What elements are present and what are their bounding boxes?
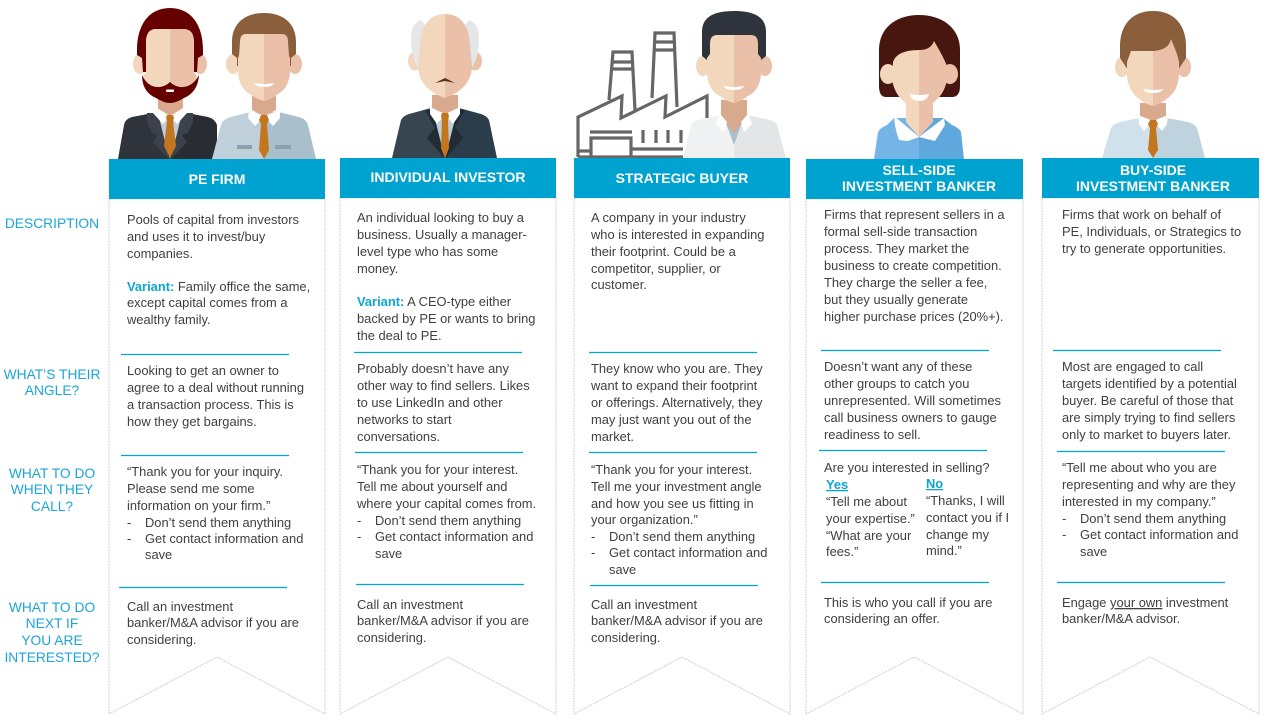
divider rules <box>819 350 989 582</box>
call response text: - <box>127 531 131 546</box>
description text: business to create competition. <box>824 258 1002 273</box>
row label: what to do next: WHAT TO DO <box>9 600 95 615</box>
description text: Pools of capital from investors <box>127 212 299 227</box>
call response text: where your capital comes from. <box>356 496 536 511</box>
angle text: Most are engaged to call <box>1062 359 1203 374</box>
call response text: - <box>357 529 361 544</box>
panel: sell-side investment banker <box>806 159 1023 714</box>
call response text: “Thank you for your inquiry. <box>127 464 283 479</box>
header: PE firm <box>109 159 325 199</box>
panel: strategic buyer <box>574 158 790 714</box>
description text: process. They market the <box>824 241 969 256</box>
illustration: strategic buyer person <box>683 11 786 158</box>
row label: what's their angle: ANGLE? <box>25 383 80 398</box>
header: individual investor: INDIVIDUAL INVESTOR <box>370 169 526 185</box>
header: buy-side investment banker: INVESTMENT BANKER <box>1076 178 1230 194</box>
header: sell-side investment banker: INVESTMENT BANKER <box>842 178 996 194</box>
angle text: to use LinkedIn and other <box>357 395 503 410</box>
description text: formal sell-side transaction <box>824 224 977 239</box>
divider rules <box>1053 350 1225 582</box>
no option: contact you if I <box>926 510 1009 525</box>
description text: Firms that work on behalf of <box>1062 207 1221 222</box>
next step text: Call an investment <box>357 597 463 612</box>
angle text: Doesn’t want any of these <box>824 359 972 374</box>
call response text: Don’t send them anything <box>145 515 291 530</box>
call response text: save <box>1080 544 1107 559</box>
yes option: “Tell me about <box>826 494 907 509</box>
angle text: or offerings. Alternatively, they <box>591 395 763 410</box>
angle text: only to market to buyers later. <box>1062 427 1231 442</box>
call response text: your organization.” <box>591 512 698 527</box>
illustration: sell-side banker woman <box>874 15 964 159</box>
angle text: agree to a deal without running <box>127 380 304 395</box>
header: strategic buyer <box>574 158 790 198</box>
next step text: Engage your own investment <box>1062 595 1228 610</box>
illustration: buy-side banker man <box>1102 11 1205 158</box>
no option: No <box>926 476 943 491</box>
next step text: considering. <box>357 630 427 645</box>
divider rules <box>354 352 524 584</box>
row label: description: DESCRIPTION <box>5 216 99 231</box>
call response text: Don’t send them anything <box>375 513 521 528</box>
no option: change my <box>926 527 990 542</box>
call response text: interested in my company.” <box>1062 494 1216 509</box>
description text: A CEO-type either <box>404 294 512 309</box>
angle text: networks to start <box>357 412 452 427</box>
description text: Firms that represent sellers in a <box>824 207 1005 222</box>
yes option: Yes <box>826 477 848 492</box>
row label: what to do next: NEXT IF <box>26 616 78 631</box>
person: bearded man <box>118 8 217 159</box>
description text: level type who has some <box>357 244 498 259</box>
person: smiling man with tie <box>212 13 316 159</box>
call response text: save <box>609 562 636 577</box>
call response text: Are you interested in selling? <box>824 460 990 475</box>
illustration: individual investor <box>392 14 497 158</box>
description text: higher purchase prices (20%+). <box>824 309 1004 324</box>
angle text: market. <box>591 429 634 444</box>
call response text: - <box>1062 527 1066 542</box>
row label: what's their angle: WHAT’S THEIR <box>4 367 100 382</box>
header: individual investor <box>340 158 556 198</box>
angle text: readiness to sell. <box>824 427 921 442</box>
description text: except capital comes from a <box>127 295 288 310</box>
header: buy-side investment banker: BUY-SIDE <box>1120 162 1186 178</box>
angle text: how they get bargains. <box>127 414 257 429</box>
next step text: banker/M&A advisor. <box>1062 611 1180 626</box>
header: buy-side investment banker <box>1042 158 1259 198</box>
angle text: are simply trying to find sellers <box>1062 410 1235 425</box>
panel: buy-side investment banker <box>1042 158 1259 714</box>
row label: what to do when they call: WHEN THEY <box>11 482 93 497</box>
angle text: conversations. <box>357 429 440 444</box>
next step text: considering. <box>591 630 661 645</box>
header: sell-side investment banker <box>806 159 1023 199</box>
panel: individual investor <box>340 158 556 714</box>
description text: their footprint. Could be a <box>591 244 737 259</box>
call response text: “Thank you for your interest. <box>357 462 518 477</box>
call response text: save <box>145 547 172 562</box>
no option: “Thanks, I will <box>926 493 1005 508</box>
angle text: targets identified by a potential <box>1062 376 1237 391</box>
yes option: “What are your <box>826 528 912 543</box>
call response text: Get contact information and <box>145 531 303 546</box>
call response text: representing and why are they <box>1062 477 1236 492</box>
description text: Family office the same, <box>174 279 310 294</box>
row label: what to do when they call: CALL? <box>31 499 73 514</box>
call response text <box>824 460 1009 559</box>
call response text: Tell me about yourself and <box>357 479 507 494</box>
call response text: information on your firm.” <box>127 498 270 513</box>
call response text: - <box>1062 511 1066 526</box>
angle text: may just want you out of the <box>591 412 752 427</box>
next step text: considering. <box>127 632 197 647</box>
call response text: Get contact information and <box>375 529 533 544</box>
description text: money. <box>357 261 398 276</box>
next step text: Call an investment <box>591 597 697 612</box>
call response text: and how you see us fitting in <box>591 496 754 511</box>
illustration: factory <box>578 33 707 157</box>
description text: and uses it to invest/buy <box>127 229 266 244</box>
description text: business. Usually a manager- <box>357 227 527 242</box>
call response text: - <box>127 515 131 530</box>
description text: An individual looking to buy a <box>357 210 524 225</box>
description text: backed by PE or wants to bring <box>357 311 535 326</box>
description text: try to generate opportunities. <box>1062 241 1226 256</box>
call response text: “Tell me about who you are <box>1062 460 1217 475</box>
call response text: Don’t send them anything <box>609 529 755 544</box>
next step text: banker/M&A advisor if you are <box>357 613 529 628</box>
call response text: Please send me some <box>127 481 255 496</box>
call response text: Get contact information and <box>609 545 767 560</box>
call response text: - <box>591 529 595 544</box>
description text: companies. <box>127 246 193 261</box>
description text: They charge the seller a fee, <box>824 275 987 290</box>
angle text: Probably doesn’t have any <box>357 361 509 376</box>
description text: A company in your industry <box>591 210 746 225</box>
call response text: Don’t send them anything <box>1080 511 1226 526</box>
description text: Variant: <box>127 279 174 294</box>
angle text: unrepresented. Will sometimes <box>824 393 1001 408</box>
angle text: other groups to catch you <box>824 376 969 391</box>
next step text: Call an investment <box>127 599 233 614</box>
next step text: This is who you call if you are <box>824 595 992 610</box>
yes option: your expertise.” <box>826 511 915 526</box>
description text: customer. <box>591 277 647 292</box>
description text: the deal to PE. <box>357 328 442 343</box>
call response text: - <box>591 545 595 560</box>
divider rules <box>589 352 758 586</box>
header: PE firm: PE FIRM <box>189 171 245 187</box>
header: sell-side investment banker: SELL-SIDE <box>882 162 956 178</box>
call response text: - <box>357 513 361 528</box>
angle text: buyer. Be careful of those that <box>1062 393 1234 408</box>
call response text: Tell me your investment angle <box>591 479 762 494</box>
description text: PE, Individuals, or Strategics to <box>1062 224 1241 239</box>
next step text: banker/M&A advisor if you are <box>127 615 299 630</box>
row label: what to do next: INTERESTED? <box>4 650 100 665</box>
row label: what to do next: YOU ARE <box>21 633 83 648</box>
header: strategic buyer: STRATEGIC BUYER <box>616 170 748 186</box>
description text: wealthy family. <box>126 312 211 327</box>
angle text: other way to find sellers. Likes <box>357 378 530 393</box>
angle text: They know who you are. They <box>591 361 763 376</box>
row label: what to do when they call: WHAT TO DO <box>9 466 95 481</box>
angle text: call business owners to gauge <box>824 410 997 425</box>
panel: PE firm <box>109 159 325 714</box>
call response text: save <box>375 546 402 561</box>
description text: Variant: <box>357 294 404 309</box>
description text: who is interested in expanding <box>590 227 764 242</box>
yes option: fees.” <box>826 544 858 559</box>
description text: competitor, supplier, or <box>591 261 721 276</box>
angle text: want to expand their footprint <box>590 378 758 393</box>
angle text: a transaction process. This is <box>127 397 294 412</box>
next step text: considering an offer. <box>824 611 940 626</box>
description text: but they usually generate <box>824 292 968 307</box>
angle text: Looking to get an owner to <box>127 363 279 378</box>
next step text: banker/M&A advisor if you are <box>591 613 763 628</box>
no option: mind.” <box>926 543 962 558</box>
call response text: “Thank you for your interest. <box>591 462 752 477</box>
call response text: Get contact information and <box>1080 527 1238 542</box>
divider rules <box>119 354 289 588</box>
illustration: PE firm people <box>118 8 316 159</box>
